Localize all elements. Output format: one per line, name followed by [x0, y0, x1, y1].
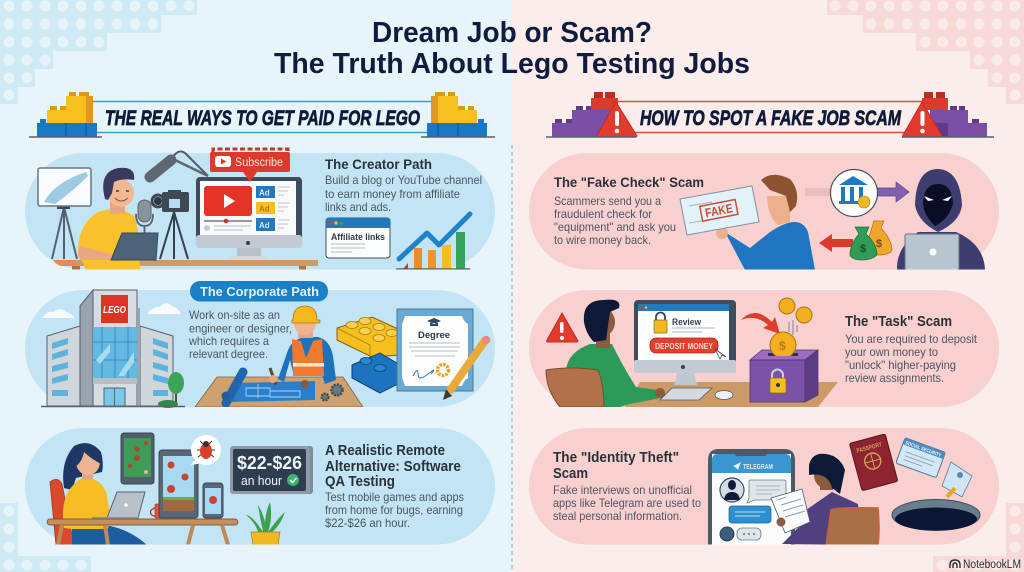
icon: dark hole: [892, 500, 980, 530]
icon: passport: [849, 434, 898, 491]
panel: fake check scam: [529, 153, 999, 270]
icon: monitor: Ad: [259, 204, 270, 214]
chart: rising bars and arrow: [396, 214, 470, 269]
icon: ladybug speech bubble: [191, 435, 221, 465]
icon: falling coins: [779, 298, 812, 335]
icon: subscribe callout: [210, 149, 290, 182]
icon: purple locked deposit box: [750, 332, 818, 402]
icon: document with key: [942, 462, 972, 497]
tester figure: [63, 443, 147, 545]
icon: chair: [546, 368, 604, 407]
icon: chair: [50, 479, 74, 545]
banner heading: real ways: THE REAL WAYS TO GET PAID FOR LEGO: [105, 107, 420, 130]
icon: degree certificate: [397, 309, 473, 391]
text: creator path: Build a blog or YouTube channel: [325, 174, 482, 187]
text: QA testing: Test mobile games and apps: [325, 491, 464, 504]
icon: affiliate links card: [326, 218, 390, 258]
icon: LEGO office building: LEGO: [103, 305, 126, 316]
text: task scam: You are required to deposit: [845, 333, 978, 346]
icon: subscribe callout: Subscribe: [235, 157, 283, 169]
icon: right brick stack: [421, 92, 495, 137]
text: identity theft: Fake interviews on unofficial: [553, 484, 692, 497]
section banner: real ways: [29, 92, 495, 137]
icon: boom microphone: [150, 151, 208, 177]
panel: task scam: [529, 290, 999, 407]
man with resume: [771, 454, 862, 545]
text: fake check: The "Fake Check" Scam: [554, 175, 704, 190]
task scam illustration: [546, 298, 838, 407]
icon: blue lego brick: [352, 353, 400, 393]
icon: phone with telegram chat: TELEGRAM: [743, 462, 773, 471]
text: corporate path: engineer or designer,: [189, 322, 292, 336]
text: fake check: to wire money back.: [554, 234, 651, 247]
text: corporate path: which requires a: [188, 335, 270, 348]
banner heading: spot a scam: HOW TO SPOT A FAKE JOB SCAM: [640, 107, 901, 130]
text: task scam: [845, 313, 978, 385]
creator illustration: softbox, person, camera: [38, 149, 470, 270]
text: task scam: your own money to: [845, 346, 938, 359]
icon: money bags: $: [860, 243, 866, 255]
motion blur: [805, 188, 830, 196]
callout: hourly pay: [230, 446, 313, 494]
identity theft illustration: [708, 434, 980, 545]
icon: monitor: Ad: [259, 188, 270, 198]
text: fake check: [554, 175, 704, 247]
text: task scam: The "Task" Scam: [845, 313, 952, 330]
icon: affiliate links card: Affiliate links: [331, 232, 385, 243]
text: fake check: fraudulent check for: [554, 208, 652, 221]
icon: fake check: FAKE: [704, 201, 734, 220]
text: task scam: "unlock" higher-paying: [845, 359, 956, 372]
text: identity theft: [553, 449, 701, 523]
icon: red arrow to victim: [819, 234, 853, 252]
icon: bank: [830, 170, 878, 216]
text: QA testing: from home for bugs, earning: [325, 504, 463, 517]
icon: right purple bricks and warning: [902, 92, 994, 137]
QA illustration: tester, devices, price: [47, 433, 313, 545]
icon: desk: [53, 260, 318, 270]
fake check illustration: [680, 169, 985, 270]
icon: softbox light: [38, 168, 91, 259]
icon: LEGO office building: [41, 290, 185, 408]
label: corporate path pill: The Corporate Path: [200, 284, 319, 299]
panel: software QA testing: [25, 428, 495, 545]
lego studs: top-right corner: [827, 0, 1024, 104]
icon: monitor: Ad: [259, 221, 270, 230]
icon: monitor with deposit button: DEPOSIT MONEY: [655, 341, 713, 351]
icon: game tablet: [121, 433, 154, 484]
icon: yellow lego brick: [337, 317, 400, 357]
text: fake check: "equipment" and ask you: [554, 221, 676, 234]
figure holding check: [716, 175, 815, 270]
icon: left purple bricks and warning: [546, 92, 637, 137]
worker figure: [269, 306, 336, 388]
title: The Truth About Lego Testing Jobs: [274, 48, 750, 80]
icon: fake check: [680, 186, 759, 235]
text: QA testing: [325, 442, 464, 530]
panel: the corporate path: [25, 281, 495, 408]
corporate illustration: worker, desk, bricks, degree: [195, 306, 490, 407]
text: creator path: [325, 157, 482, 214]
title: Dream Job or Scam?: [372, 17, 652, 49]
text: identity theft: The "Identity Theft": [553, 449, 679, 466]
section banner: spot a scam: [546, 92, 994, 137]
icon: money bags: [850, 221, 892, 260]
panel: identity theft scam: [529, 428, 999, 545]
icon: keyboard and mouse: [660, 388, 733, 400]
lego studs: bottom-right corner: [933, 503, 1024, 572]
icon: laptop: [905, 234, 959, 270]
icon: video camera on tripod: [152, 190, 189, 259]
icon: curved red arrow: [741, 313, 780, 334]
icon: app tablet with bugs: [159, 450, 198, 518]
man at computer: [566, 300, 665, 407]
icon: monitor with deposit button: [634, 300, 736, 385]
icon: chair: [826, 508, 879, 545]
text: QA testing: A Realistic Remote: [325, 442, 445, 459]
icon: desk: [625, 382, 838, 407]
icon: potted plant: [246, 502, 285, 545]
icon: tablet: [111, 233, 158, 260]
hacker figure: [897, 169, 985, 270]
text: QA testing: QA Testing: [325, 473, 395, 490]
text: QA testing: $22-$26 an hour.: [325, 517, 410, 530]
icon: purple locked deposit box: $: [779, 339, 786, 353]
creator figure: [78, 168, 140, 270]
icon: pencil: [443, 336, 490, 400]
label: corporate path pill: [190, 281, 328, 302]
icon: social security card: [896, 438, 945, 478]
text: identity theft: Scam: [553, 465, 588, 482]
icon: table: [47, 519, 238, 545]
callout: hourly pay: an hour: [241, 474, 282, 488]
icon: purple arrow to hacker: [875, 182, 909, 202]
text: identity theft: steal personal information.: [553, 510, 682, 523]
text: creator path: The Creator Path: [325, 157, 432, 172]
icon: phone with bug: [203, 483, 223, 518]
background: left half: [0, 0, 512, 572]
lego studs: top-left corner: [0, 0, 197, 104]
text: corporate path: [188, 309, 292, 361]
icon: monitor: [196, 177, 302, 259]
icon: laptop: [92, 492, 145, 520]
text: identity theft: apps like Telegram are used to: [553, 497, 701, 510]
text: creator path: links and ads.: [325, 201, 391, 214]
text: task scam: review assignments.: [845, 372, 944, 385]
lego studs: bottom-left corner: [0, 503, 91, 572]
icon: social security card: SOCIAL SECURITY: [904, 440, 942, 459]
icon: left brick stack: [29, 92, 102, 137]
icon: warning triangle: [547, 313, 578, 342]
icon: money bags: $: [876, 238, 882, 250]
text: fake check: Scammers send you a: [554, 195, 662, 208]
text: corporate path: Work on-site as an: [189, 309, 280, 322]
background: right half: [512, 0, 1024, 572]
title: [274, 17, 750, 80]
text: corporate path: relevant degree.: [189, 348, 268, 361]
icon: desk microphone: [136, 200, 153, 236]
text: creator path: to earn money from affiliate: [325, 188, 460, 201]
icon: monitor with deposit button: Review: [672, 317, 702, 328]
icon: phone with telegram chat: [708, 449, 795, 545]
icon: mug: [150, 504, 165, 518]
text: QA testing: Alternative: Software: [325, 458, 461, 475]
panel: the creator path: [25, 149, 495, 270]
icon: passport: PASSPORT: [856, 442, 883, 455]
icon: degree certificate: Degree: [418, 330, 450, 341]
callout: hourly pay: $22-$26: [237, 453, 302, 473]
icon: drafting desk and blueprint: [195, 372, 363, 407]
